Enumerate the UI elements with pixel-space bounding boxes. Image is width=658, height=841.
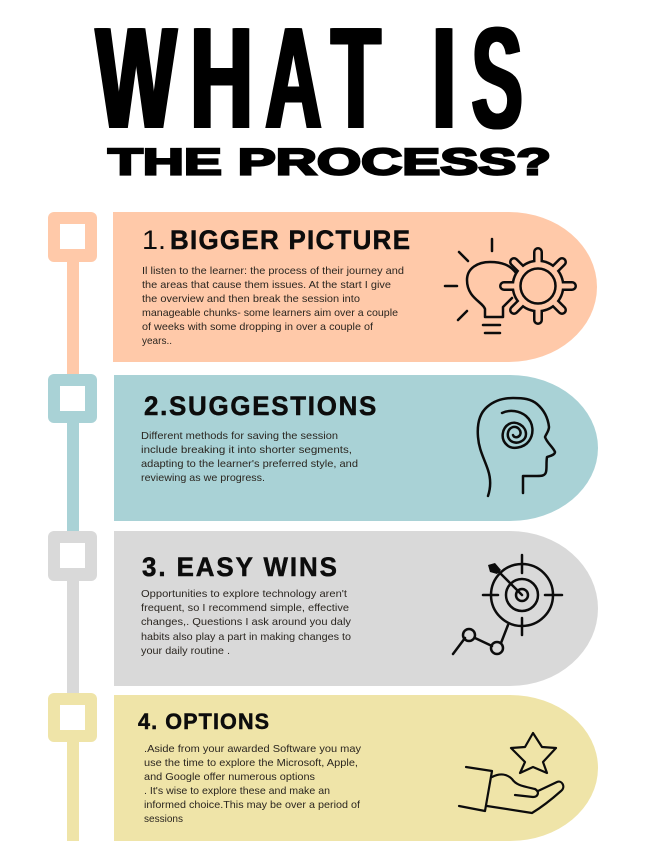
body text 4: sessions (144, 813, 183, 825)
panel 3 background (114, 531, 598, 686)
body text 2: adapting to the learner's preferred style, and (141, 458, 358, 470)
title: WHAT IS: A (265, 0, 322, 159)
panel 2 background (114, 375, 598, 521)
timeline node 1 (48, 212, 97, 375)
heading 3: 3. EASY WINS (142, 552, 337, 582)
body text 4: and Google offer numerous options (144, 771, 315, 783)
body text 1: the overview and then break the session into (142, 293, 360, 305)
timeline node 3 (48, 531, 97, 694)
title: WHAT IS (94, 0, 523, 159)
body text 3: frequent, so I recommend simple, effective (141, 602, 349, 614)
panel: bigger picture (113, 212, 597, 362)
body text 1: years.. (142, 335, 172, 347)
title: WHAT IS: H (190, 0, 253, 159)
body text 2: reviewing as we progress. (141, 472, 265, 484)
icon: hand holding star (459, 733, 563, 813)
heading 4: 4. OPTIONS (138, 709, 269, 734)
timeline node 4 (48, 693, 97, 841)
body text 1: manageable chunks- some learners aim over a couple (142, 307, 398, 319)
panel: suggestions (114, 375, 598, 521)
body text 1: Il listen to the learner: the process of their journey and (142, 265, 404, 277)
body text 3: habits also play a part in making changes to (141, 631, 351, 643)
timeline node 2 (48, 374, 97, 532)
body text 1: of weeks with some dropping in over a couple of (142, 321, 373, 333)
body text 2: Different methods for saving the session (141, 430, 338, 442)
icon: target with arrow and chart (453, 555, 562, 654)
title: WHAT IS: T (331, 0, 381, 159)
body text 2: include breaking it into shorter segments, (141, 444, 352, 456)
body text 2 (141, 430, 358, 484)
body text 3: your daily routine . (141, 645, 230, 657)
body text 3 (141, 588, 352, 657)
panel: options (114, 695, 598, 841)
panel 4 background (114, 695, 598, 841)
subtitle: THE PROCESS?: THE PROCESS? (108, 142, 551, 182)
body text 1 (142, 265, 404, 347)
heading 1: BIGGER PICTURE (170, 225, 410, 255)
heading 2: 2.SUGGESTIONS (144, 391, 376, 421)
panel: easy wins (114, 531, 598, 686)
icon: light bulb and gear (445, 239, 572, 333)
timeline (48, 212, 97, 841)
body text 3: changes,. Questions I ask around you daly (141, 616, 352, 628)
body text 4: use the time to explore the Microsoft, Apple, (144, 757, 358, 769)
body text 4: . It's wise to explore these and make an (144, 785, 330, 797)
title: WHAT IS: W (96, 0, 176, 159)
body text 3: Opportunities to explore technology aren't (141, 588, 347, 600)
body text 1: the areas that cause them issues. At the start I give (142, 279, 391, 291)
panel 1 background (113, 212, 597, 362)
body text 4: .Aside from your awarded Software you may (144, 743, 362, 755)
heading 1: 1. (142, 225, 166, 255)
body text 4 (144, 743, 362, 825)
icon: head with spiral (478, 398, 555, 496)
title: WHAT IS: I (432, 0, 456, 159)
body text 4: informed choice.This may be over a period of (144, 799, 360, 811)
title: WHAT IS: S (472, 0, 523, 159)
